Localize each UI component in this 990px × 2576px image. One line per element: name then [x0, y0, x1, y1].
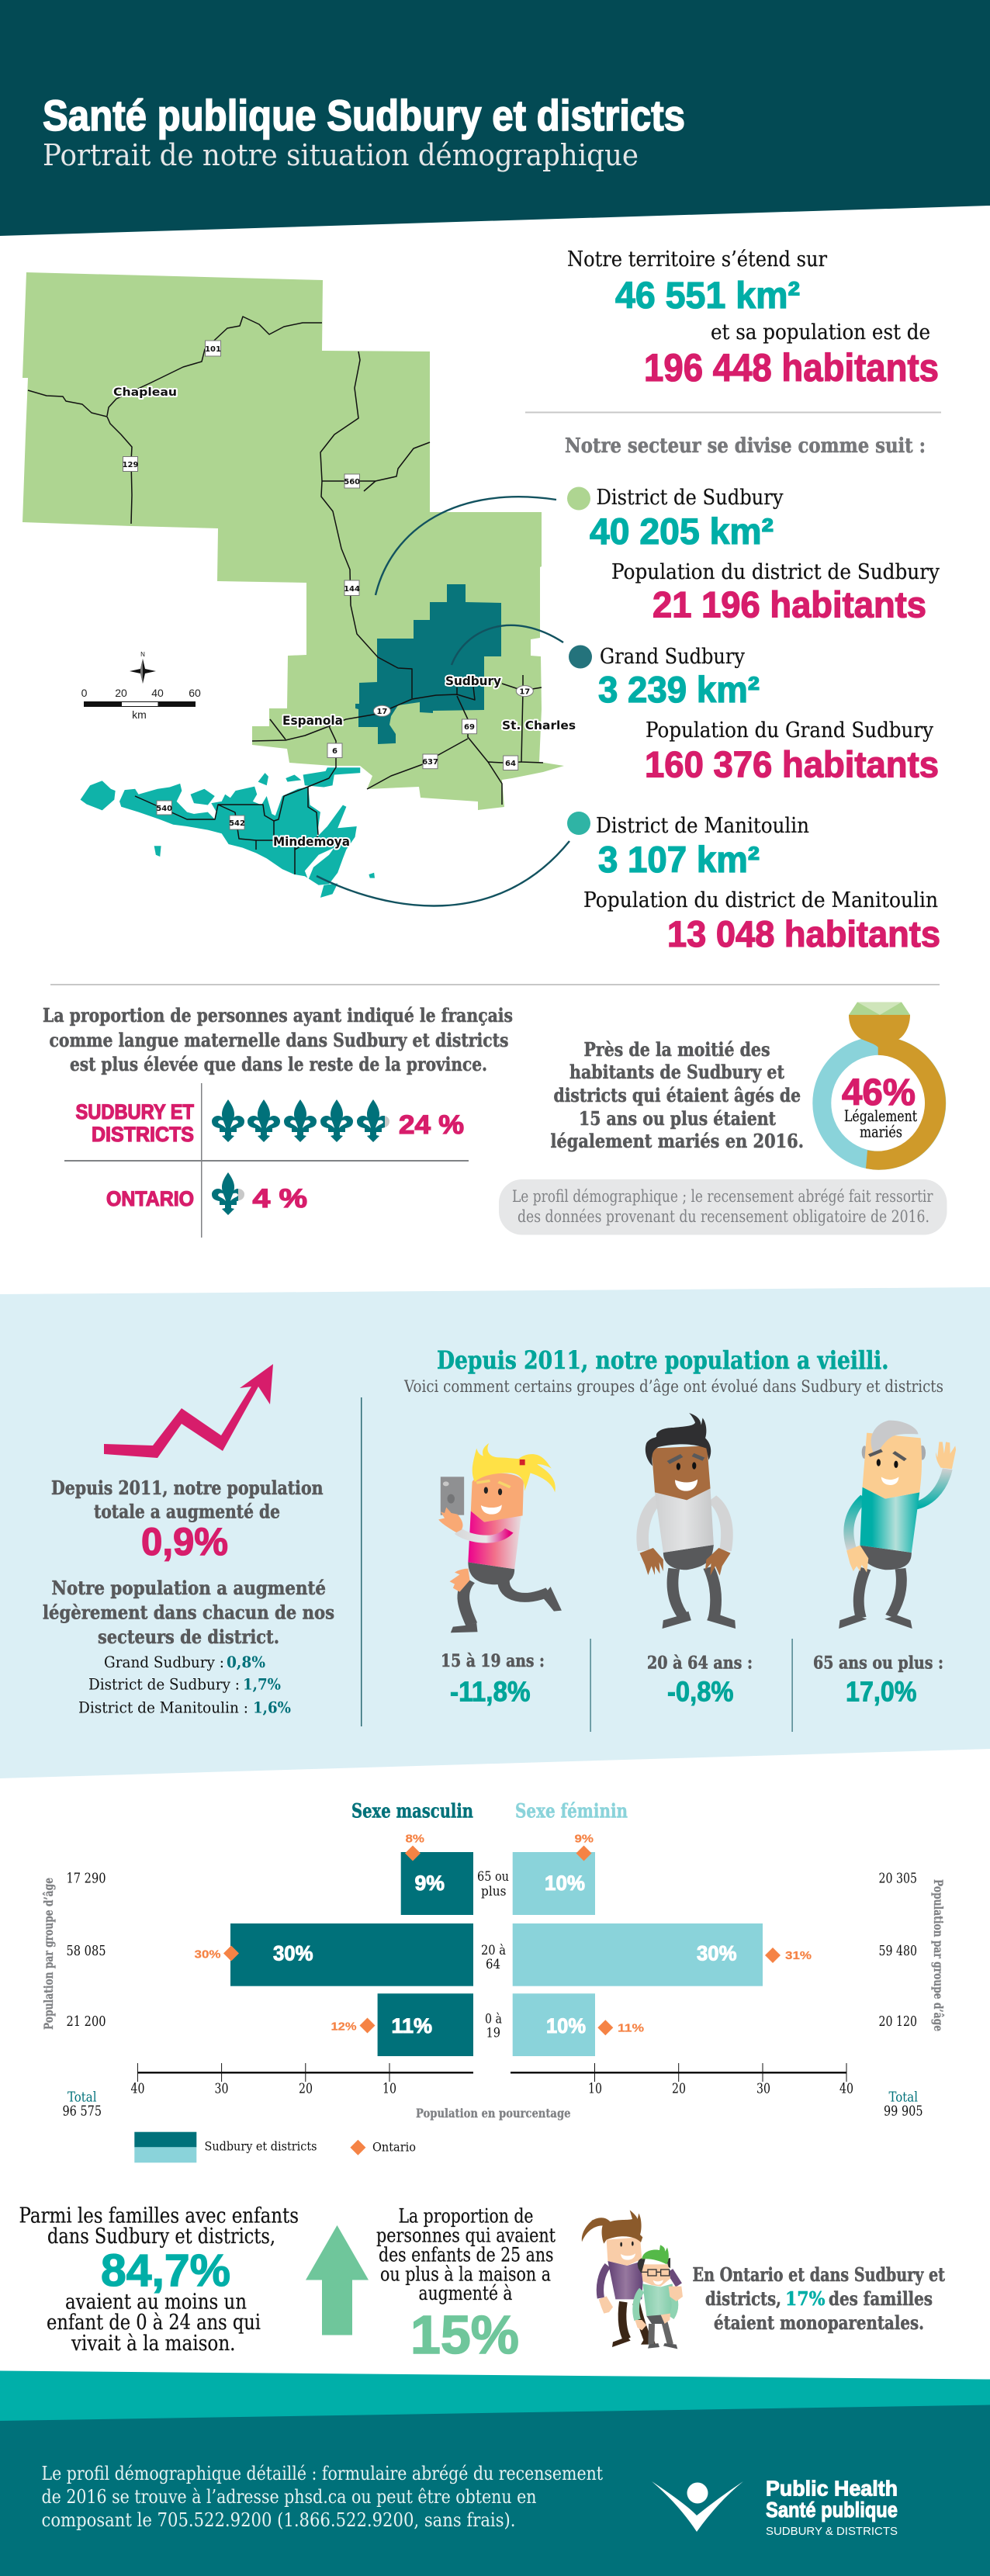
city labels: Espanola [282, 713, 343, 728]
population counts: 17 290 [67, 1870, 106, 1887]
sector: district de Manitoulin: Population du district de Manitoulin [583, 888, 938, 912]
stat: families with children: vivait à la maison. [71, 2332, 235, 2356]
stat: families with children: dans Sudbury et districts, [47, 2225, 275, 2249]
district de Sudbury area [22, 272, 564, 810]
scale bar: km [132, 708, 147, 721]
sector: district de Manitoulin [567, 812, 940, 954]
compass rose [130, 651, 156, 684]
logo [652, 2477, 898, 2538]
stat: single-parent families: 17% [785, 2287, 826, 2310]
stat: single-parent families: étaient monoparentales. [714, 2311, 924, 2334]
ring chart 46%: mariés [860, 1122, 902, 1141]
panel: French mother tongue: 4 % [253, 1184, 307, 1214]
icon: up arrow [306, 2225, 369, 2335]
text block: total growth: 0,9% [141, 1520, 228, 1563]
highway shields: 542 [229, 819, 245, 828]
population counts: 20 305 [878, 1870, 917, 1887]
bars [230, 1852, 763, 2056]
stat: families with children [19, 2204, 299, 2356]
age group: 65 plus: 17,0% [846, 1676, 917, 1707]
Ontario markers [194, 1833, 812, 2035]
stat: adult children at home: augmenté à [419, 2282, 513, 2304]
highway shields: 17 [519, 687, 530, 697]
totals: 96 575 [62, 2103, 102, 2120]
compass rose: N [140, 651, 145, 658]
text block: district growth: 1,7% [243, 1674, 281, 1693]
stat: families with children: avaient au moins un [65, 2290, 247, 2314]
sector: district de Manitoulin: 3 107 km² [598, 839, 760, 880]
note box [499, 1179, 947, 1235]
text block: district growth: District de Manitoulin : [78, 1698, 248, 1716]
text block: district growth: Grand Sudbury : [104, 1653, 224, 1671]
character: senior [839, 1421, 956, 1629]
ring chart 46%: Légalement [844, 1106, 917, 1125]
divider [525, 411, 941, 413]
population pyramid chart [41, 1800, 946, 2162]
sector: Grand Sudbury: 3 239 km² [598, 669, 760, 710]
sector: district de Manitoulin: District de Manitoulin [596, 814, 809, 838]
rotated axis labels: Population par groupe d’âge [931, 1879, 946, 2031]
text block: district growth: District de Sudbury : [88, 1674, 240, 1693]
bars: 30% [273, 1941, 313, 1965]
highway shields: 637 [422, 758, 438, 767]
roads [28, 317, 543, 874]
stat: adult children at home: personnes qui avaient [376, 2224, 556, 2247]
bars: 10% [546, 2014, 586, 2038]
age group: 20 to 64 [647, 1653, 753, 1707]
sector: district de Sudbury: Population du district de Sudbury [611, 560, 940, 584]
panel: French mother tongue: SUDBURY ET [76, 1100, 194, 1124]
callout curve: district de Sudbury [376, 497, 556, 595]
axis: 40 [839, 2081, 853, 2096]
panel: French mother tongue: est plus élevée que dans le reste de la province. [70, 1053, 487, 1075]
age labels: 64 [486, 1957, 500, 1972]
fleur-de-lis row: Ontario [212, 1172, 244, 1215]
stat: single-parent families: des familles [829, 2287, 933, 2310]
Grand Sudbury area [355, 584, 501, 744]
panel: legally married text: habitants de Sudbury et [569, 1061, 784, 1083]
stat: families with children: enfant de 0 à 24 ans qui [47, 2311, 261, 2335]
panel: legally married text [551, 1038, 804, 1152]
axis [130, 2063, 853, 2096]
panel: legally married text: districts qui étaient âgés de [554, 1084, 801, 1106]
text block: total growth: secteurs de district. [98, 1626, 279, 1648]
ring chart 46% [822, 1002, 946, 1170]
stat: single-parent families [692, 2263, 945, 2334]
highway shields: 540 [156, 805, 172, 813]
city labels [113, 386, 576, 849]
callout curve: Manitoulin [317, 841, 569, 905]
text block: total growth: légèrement dans chacun de nos [43, 1601, 334, 1623]
panel: legally married text: légalement mariés en 2016. [551, 1130, 804, 1152]
subtitle: Portrait de notre situation démographique [43, 138, 639, 172]
bars: 30% [697, 1941, 737, 1965]
stat: adult children at home: ou plus à la maison a [380, 2263, 551, 2286]
bars: 10% [545, 1871, 585, 1895]
Ontario markers: 31% [785, 1949, 812, 1962]
panel: French mother tongue: comme langue maternelle dans Sudbury et districts [50, 1029, 509, 1051]
population counts: 20 120 [878, 2013, 917, 2030]
logo: SUDBURY & DISTRICTS [766, 2525, 898, 2538]
age labels: 0 à [485, 2011, 502, 2027]
totals: Total [889, 2089, 918, 2106]
totals: 99 905 [884, 2103, 923, 2120]
stat: families with children: Parmi les familles avec enfants [19, 2204, 299, 2228]
bars: 11% [391, 2014, 432, 2038]
sector: district de Manitoulin: 13 048 habitants [667, 913, 940, 954]
text block: district growth [78, 1653, 291, 1716]
sector: Grand Sudbury [569, 645, 939, 785]
age group: 20 to 64: 20 à 64 ans : [647, 1653, 753, 1673]
territory totals: 46 551 km² [615, 275, 800, 317]
footer text [42, 2463, 603, 2531]
panel: population change band [0, 1287, 990, 1778]
city labels: Mindemoya [273, 834, 350, 849]
age labels: 20 à [481, 1943, 506, 1958]
axis: 10 [382, 2081, 396, 2096]
text block: total growth: Notre population a augmenté [51, 1577, 326, 1599]
Ontario markers: 11% [618, 2022, 644, 2034]
highway shields: 6 [332, 747, 338, 756]
stat: adult children at home: La proportion de [399, 2205, 534, 2227]
age group: 15 to 19 [441, 1651, 545, 1707]
heading: female: Sexe féminin [515, 1800, 628, 1822]
sector: district de Sudbury [567, 486, 940, 625]
territory totals: Notre territoire s’étend sur [567, 248, 827, 272]
Ontario markers: 12% [331, 2020, 357, 2033]
fleur-de-lis row: Sudbury [212, 1099, 389, 1142]
character: teen [438, 1443, 562, 1633]
age group: 15 to 19: -11,8% [450, 1676, 531, 1707]
stat: adult children at home: des enfants de 25 ans [379, 2244, 554, 2266]
sector: Grand Sudbury: 160 376 habitants [645, 743, 939, 785]
age group: 65 plus: 65 ans ou plus : [813, 1653, 943, 1673]
age group: 15 to 19: 15 à 19 ans : [441, 1651, 545, 1671]
character: adult [639, 1413, 736, 1629]
panel: legally married text: 15 ans ou plus étaient [579, 1107, 776, 1130]
panel: legally married text: Près de la moitié des [583, 1038, 770, 1061]
text block: district growth: 1,6% [253, 1698, 291, 1716]
axis: 30 [756, 2081, 770, 2096]
axis: 20 [299, 2081, 313, 2096]
sector: Grand Sudbury: Grand Sudbury [600, 645, 746, 669]
heading: male: Sexe masculin [351, 1800, 473, 1822]
age labels: plus [481, 1884, 506, 1899]
rotated axis labels: Population par groupe d’âge [41, 1878, 56, 2030]
population counts: 21 200 [67, 2013, 106, 2030]
highway shields: 101 [205, 345, 221, 354]
district de Manitoulin area [81, 767, 375, 898]
title: Santé publique Sudbury et districts [43, 91, 685, 140]
text block: total growth: Depuis 2011, notre population [51, 1477, 323, 1499]
population counts: 58 085 [67, 1943, 106, 1959]
highway shields: 129 [123, 461, 138, 469]
panel: French mother tongue: DISTRICTS [92, 1123, 194, 1146]
highway shields [123, 341, 533, 829]
bars: 9% [414, 1871, 445, 1895]
stat: single-parent families: districts, [705, 2287, 781, 2310]
highway shields: 69 [464, 723, 475, 732]
scale bar: 0 [81, 687, 88, 699]
heading: ageing: Depuis 2011, notre population a vieilli. [437, 1345, 889, 1375]
rotated axis labels [41, 1878, 946, 2031]
age labels: 19 [486, 2025, 500, 2041]
panel: French mother tongue: ONTARIO [106, 1187, 194, 1210]
totals [62, 2089, 923, 2120]
text block: district growth: 0,8% [227, 1653, 265, 1671]
stat: adult children at home [376, 2205, 556, 2365]
scale bar: 60 [189, 687, 201, 699]
panel: French mother tongue: La proportion de personnes ayant indiqué le français [43, 1004, 513, 1027]
ring chart 46%: 46% [842, 1072, 916, 1113]
city labels: St. Charles [502, 718, 576, 732]
callout curve: Grand Sudbury [452, 625, 563, 665]
axis: 30 [214, 2081, 228, 2096]
city labels: Chapleau [113, 386, 177, 399]
logo: Santé publique [766, 2498, 898, 2522]
divider [50, 984, 940, 985]
territory totals: et sa population est de [711, 320, 930, 345]
legend: Ontario [372, 2140, 416, 2154]
territory totals: 196 448 habitants [644, 346, 939, 390]
stat: adult children at home: 15% [410, 2304, 519, 2365]
Ontario markers: 9% [574, 1833, 594, 1845]
panel: French mother tongue: 24 % [399, 1110, 464, 1140]
highway shields: 144 [344, 585, 360, 594]
highway shields: 17 [376, 708, 387, 716]
illustration: parent and child [582, 2210, 683, 2349]
age labels: 65 ou [477, 1869, 509, 1885]
age group: 65 plus [813, 1653, 943, 1707]
scale bar [81, 687, 201, 721]
axis: 40 [130, 2081, 144, 2096]
age group: 20 to 64: -0,8% [667, 1676, 734, 1707]
territory map [22, 272, 576, 898]
scale bar: 40 [151, 687, 164, 699]
sector heading: Notre secteur se divise comme suit : [565, 435, 926, 458]
footer text: de 2016 se trouve à l’adresse phsd.ca ou peut être obtenu en [42, 2486, 537, 2508]
age labels [477, 1869, 509, 2041]
sector: district de Sudbury: 21 196 habitants [652, 583, 926, 625]
population counts: 59 480 [878, 1943, 917, 1959]
axis: 20 [672, 2081, 686, 2096]
icon: rising arrow [104, 1364, 273, 1458]
city labels: Sudbury [445, 673, 502, 688]
sector: district de Sudbury: District de Sudbury [596, 486, 784, 510]
Ontario markers: 8% [405, 1833, 424, 1845]
sector: Grand Sudbury: Population du Grand Sudbury [646, 718, 934, 743]
totals: Total [68, 2089, 97, 2106]
text block: total growth [43, 1477, 334, 1648]
logo: Public Health [766, 2477, 898, 2500]
header band [0, 0, 990, 236]
stat: families with children: 84,7% [101, 2245, 230, 2296]
legend: Sudbury et districts [205, 2138, 317, 2154]
population counts [67, 1870, 917, 2030]
Ontario markers: 30% [194, 1948, 220, 1961]
footer band [0, 2371, 990, 2576]
axis title: Population en pourcentage [416, 2106, 571, 2121]
text block: total growth: totale a augmenté de [94, 1501, 280, 1522]
panel: French mother tongue [43, 1004, 513, 1238]
axis: 10 [588, 2081, 602, 2096]
footer text: composant le 705.522.9200 (1.866.522.9200, sans frais). [42, 2509, 515, 2531]
sector: district de Sudbury: 40 205 km² [590, 511, 774, 552]
highway shields: 64 [505, 760, 516, 768]
footer text: Le profil démographique détaillé : formulaire abrégé du recensement [42, 2463, 603, 2484]
legend [134, 2132, 416, 2162]
scale bar: 20 [115, 687, 127, 699]
highway shields: 560 [344, 478, 360, 486]
territory totals [567, 248, 939, 390]
